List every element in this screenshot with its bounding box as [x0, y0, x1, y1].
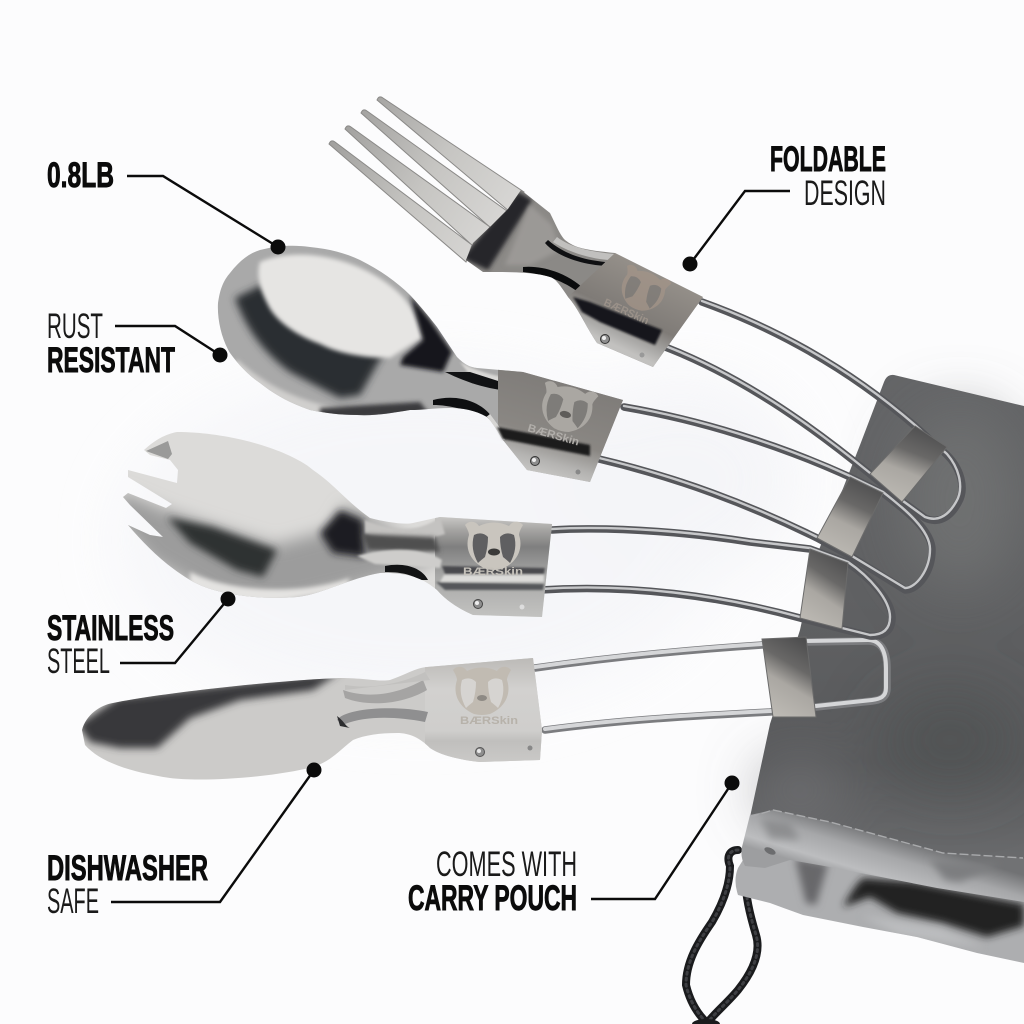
- leader line: [690, 191, 790, 264]
- callout text: SAFE: [47, 882, 99, 921]
- fork wire handle: [660, 301, 962, 520]
- spork tine tip highlight: [146, 441, 172, 459]
- callout text: COMES WITH: [436, 845, 577, 884]
- callout text: DESIGN: [804, 174, 886, 213]
- callout: weight: [47, 156, 286, 254]
- leader line: [111, 770, 314, 902]
- callout text: RESISTANT: [47, 341, 175, 380]
- spoon bear logo: [535, 380, 599, 438]
- pouch cord: [686, 850, 758, 1024]
- callout: carry pouch: [408, 776, 740, 918]
- pouch lower gather lobe: [736, 860, 1024, 963]
- knife clip: [762, 637, 816, 717]
- callout text: [408, 845, 577, 918]
- callout text: [47, 849, 208, 921]
- knife wire handle: [535, 640, 887, 730]
- callout: foldable design: [682, 140, 886, 272]
- callout text: STEEL: [47, 642, 110, 681]
- leader line: [115, 326, 220, 355]
- leader line: [591, 783, 732, 899]
- lower lobe dark fold: [795, 858, 1024, 937]
- dot: [682, 256, 698, 272]
- knife bear logo: [453, 667, 511, 715]
- dot: [220, 592, 236, 606]
- callout text: FOLDABLE: [770, 140, 886, 179]
- dot: [306, 762, 322, 778]
- knife rivets: [476, 746, 532, 756]
- spork plate dark bands: [436, 566, 545, 590]
- pouch upper gather lobe: [735, 805, 1024, 905]
- spork head and plate: [123, 432, 552, 617]
- knife brand text: BÆRSkin: [460, 715, 518, 727]
- knife utensil: [70, 637, 887, 790]
- spoon brand text: BÆRSkin: [526, 422, 581, 449]
- spork clip: [800, 549, 848, 629]
- pouch main body: [750, 375, 1024, 860]
- pouch seam: [750, 810, 1023, 858]
- spoon clip: [817, 477, 883, 557]
- leader line: [120, 599, 228, 663]
- callout text: DISHWASHER: [47, 849, 208, 888]
- fork tines: [329, 97, 524, 262]
- spork brand text: BÆRSkin: [463, 566, 523, 578]
- spork rivets: [474, 600, 524, 610]
- callout: stainless steel: [47, 592, 236, 681]
- callout text: CARRY POUCH: [408, 879, 577, 918]
- fork bear logo: [613, 263, 672, 318]
- lower lobe highlights: [878, 920, 966, 944]
- spork wire handle: [540, 528, 892, 636]
- fork utensil: [329, 97, 962, 520]
- spork bear logo: [465, 522, 523, 570]
- fork rivets: [600, 334, 644, 358]
- fork neck and plate: [466, 190, 703, 367]
- spoon bright bowl: [258, 255, 423, 358]
- dot: [724, 776, 740, 790]
- dot: [212, 348, 228, 362]
- callout text: [770, 140, 886, 213]
- fork clip: [870, 426, 947, 502]
- knife blade and plate: [82, 658, 542, 780]
- drawstring pouch: [686, 375, 1024, 1024]
- spoon rivets: [530, 456, 580, 474]
- spork utensil: [115, 425, 892, 636]
- spoon head and plate: [218, 246, 623, 482]
- callout text: [47, 307, 175, 380]
- callout text: RUST: [47, 307, 103, 346]
- fork plate dark band: [573, 297, 662, 345]
- spoon plate dark band: [497, 427, 590, 456]
- leader line: [127, 176, 278, 247]
- spoon wire handle: [595, 406, 932, 590]
- callout text: [47, 609, 174, 681]
- background soft shading: [120, 370, 800, 710]
- fork brand text: BÆRSkin: [602, 297, 651, 327]
- callout: rust resistant: [47, 307, 228, 380]
- callout: dishwasher safe: [47, 762, 322, 921]
- dot: [270, 240, 286, 254]
- drawstring eyelet: [764, 847, 776, 855]
- spoon utensil: [210, 240, 932, 590]
- callout text: STAINLESS: [47, 609, 174, 648]
- callout text: 0.8LB: [47, 156, 114, 195]
- upper lobe creases: [760, 818, 1000, 882]
- pouch sheen: [760, 410, 1020, 815]
